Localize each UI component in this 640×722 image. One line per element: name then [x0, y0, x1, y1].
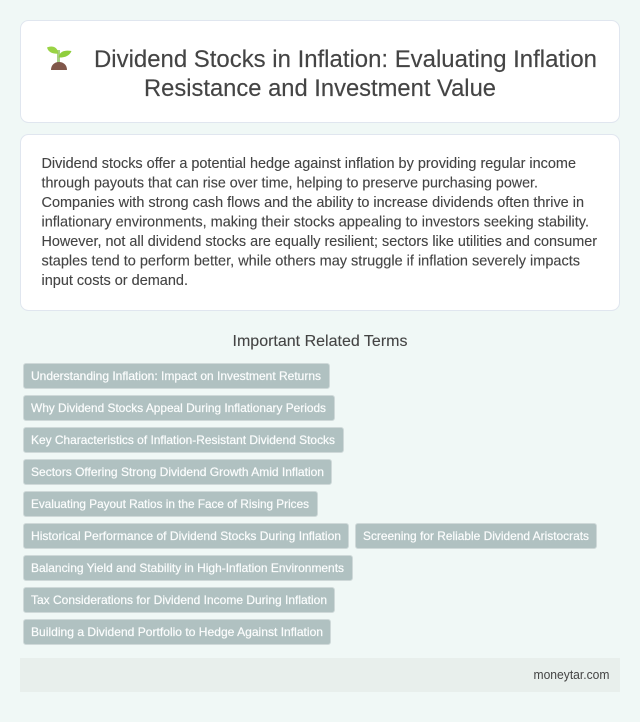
- title: Dividend Stocks in Inflation: Evaluating Inflation: [94, 46, 597, 73]
- tag: why dividend stocks appeal: Why Dividend Stocks Appeal During Inflationary Periods: [31, 401, 326, 415]
- tag: tax considerations: Tax Considerations for Dividend Income During Inflation: [31, 593, 327, 607]
- tag: historical performance: [24, 524, 348, 548]
- tag: payout ratios: Evaluating Payout Ratios in the Face of Rising Prices: [31, 497, 309, 511]
- tag: understanding inflation: [24, 364, 330, 388]
- tag: key characteristics: Key Characteristics of Inflation-Resistant Dividend Stocks: [31, 433, 335, 447]
- tag: balancing yield: Balancing Yield and Stability in High-Inflation Environments: [31, 561, 344, 575]
- panel: description card: [20, 134, 620, 310]
- text block: description: Dividend stocks offer a potential hedge against inflation by providing regular income: [42, 156, 576, 172]
- text block: description: through payouts that can rise over time, helping to preserve purchasing power.: [42, 176, 538, 192]
- heading: related terms: Important Related Terms: [232, 333, 408, 350]
- text block: description: staples tend to perform better, while others may struggle if inflation severely impacts: [42, 254, 580, 270]
- title: [94, 46, 597, 102]
- tag: tax considerations: [24, 588, 334, 612]
- text block: description: Companies with strong cash flows and the ability to increase dividends often thrive in: [42, 195, 584, 211]
- tag: building a portfolio: [24, 620, 330, 644]
- title: Resistance and Investment Value: [144, 75, 496, 102]
- tag: balancing yield: [24, 556, 352, 580]
- footer: [20, 658, 620, 692]
- tag: sectors: Sectors Offering Strong Dividend Growth Amid Inflation: [31, 465, 324, 479]
- text block: description: inflationary environments, making their stocks appealing to investors seeking stability.: [42, 214, 589, 230]
- tag: historical performance: Historical Performance of Dividend Stocks During Inflation: [31, 529, 341, 543]
- icon: seedling: [47, 46, 72, 70]
- text block: description: input costs or demand.: [42, 273, 188, 289]
- panel: title card: [20, 20, 620, 122]
- footer: moneytar.com: [534, 668, 610, 682]
- tag: screening aristocrats: [356, 524, 596, 548]
- text block: description: However, not all dividend stocks are equally resilient; sectors like utilities and consumer: [42, 234, 597, 250]
- text block: description: [42, 156, 597, 289]
- tag: screening aristocrats: Screening for Reliable Dividend Aristocrats: [363, 529, 589, 543]
- tag: understanding inflation: Understanding Inflation: Impact on Investment Returns: [31, 369, 321, 383]
- tag: payout ratios: [24, 492, 318, 516]
- tag: sectors: [24, 460, 332, 484]
- tag: building a portfolio: Building a Dividend Portfolio to Hedge Against Inflation: [31, 625, 323, 639]
- tag: why dividend stocks appeal: [24, 396, 334, 420]
- tag: key characteristics: [24, 428, 344, 452]
- panel: term tags: [24, 364, 596, 644]
